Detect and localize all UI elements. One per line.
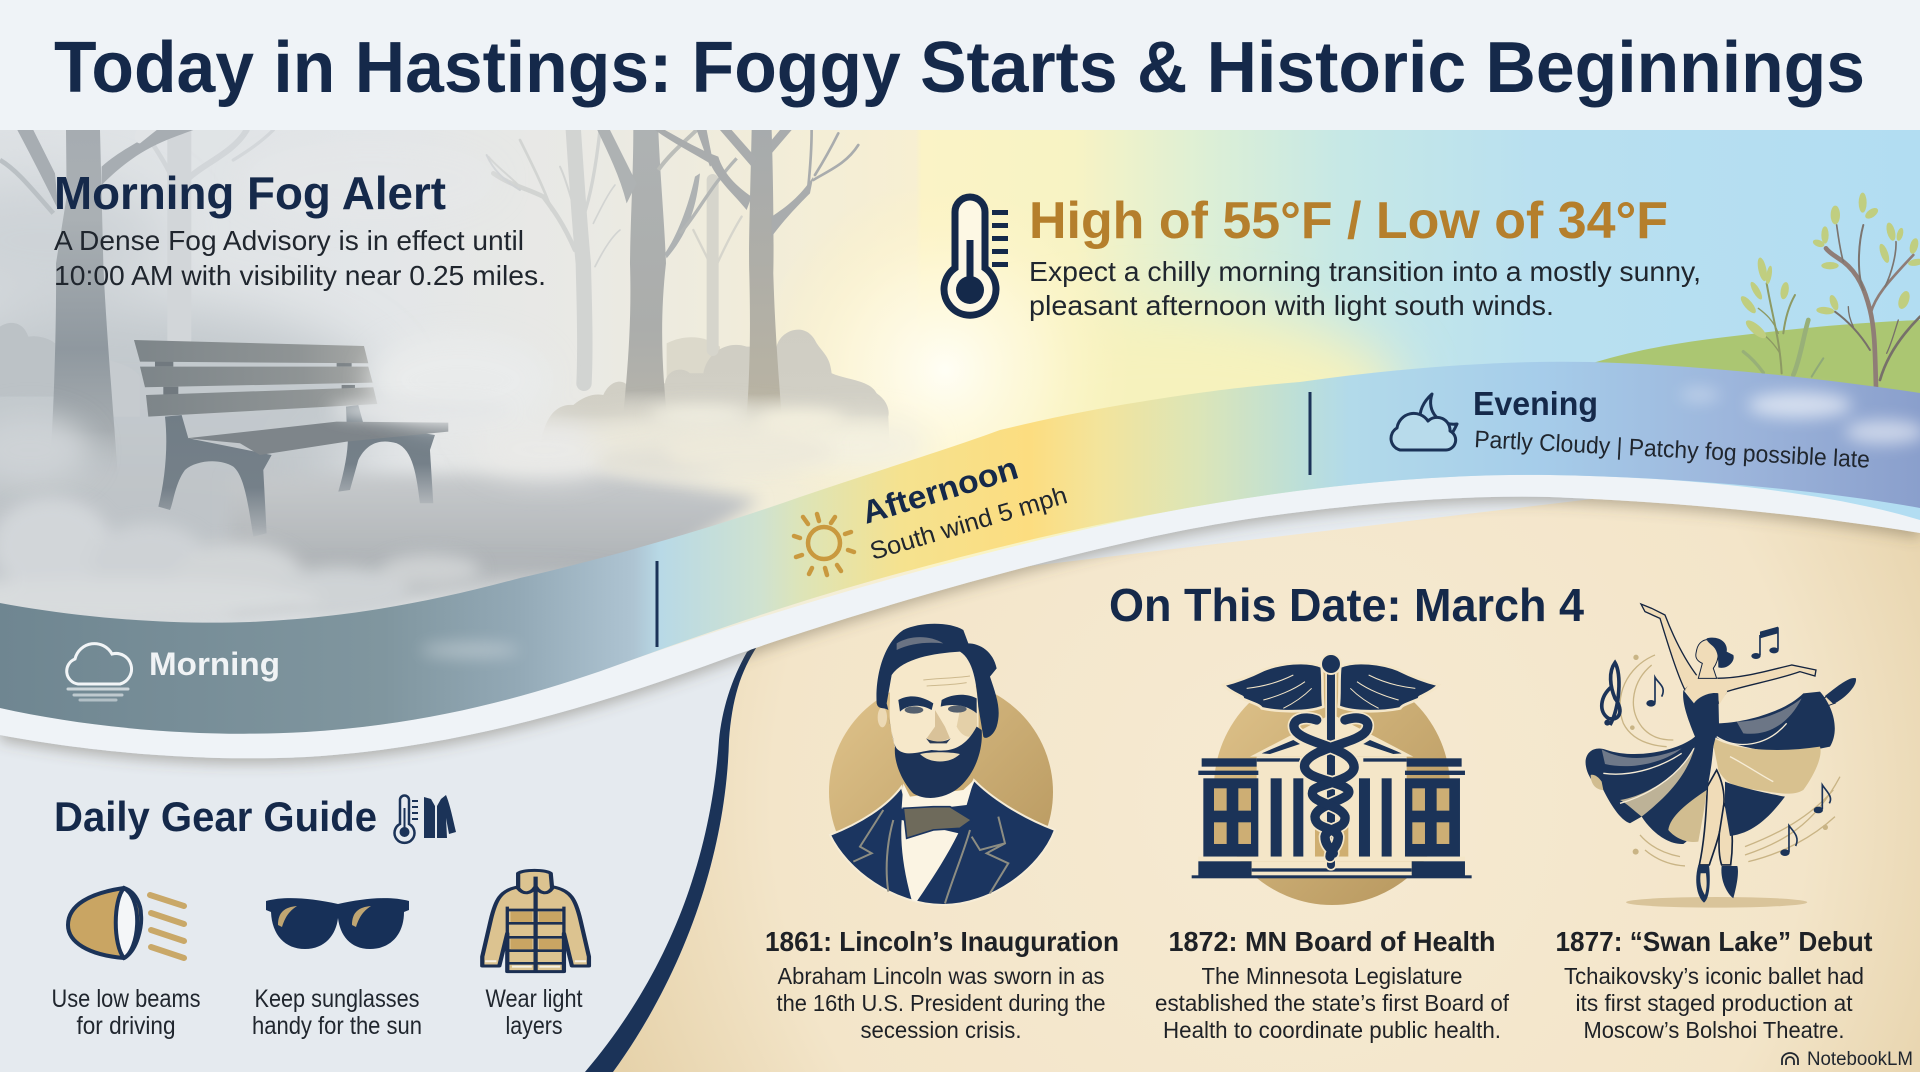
icon: puffer jacket	[482, 870, 589, 972]
panel: sky and fog scene	[0, 130, 1920, 660]
panel: gear guide background	[0, 600, 1920, 1072]
heading: on this date: On This Date: March 4	[1109, 579, 1584, 631]
icon: morning fog cloud	[67, 644, 132, 700]
green hill	[1594, 320, 1920, 393]
text block: high and low temperature: pleasant afternoon with light south winds.	[1029, 290, 1554, 321]
event: Minnesota board of health text: established the state’s first Board of	[1155, 990, 1510, 1016]
header bar	[0, 0, 1920, 130]
divider: afternoon to evening	[1308, 392, 1312, 475]
text block: afternoon	[858, 450, 1070, 566]
event: Minnesota board of health text: Health to coordinate public health.	[1163, 1017, 1501, 1043]
legs and shoes	[1699, 770, 1724, 865]
gear labels: Wear light	[486, 985, 583, 1013]
wings	[1223, 663, 1439, 711]
illustration: Abraham Lincoln portrait	[829, 624, 1055, 905]
event: Swan Lake debut text	[1556, 926, 1872, 1043]
tree A foreground	[0, 130, 193, 483]
tree B	[150, 130, 520, 340]
icon: sunglasses	[266, 898, 409, 949]
icon: thermometer	[944, 197, 1008, 315]
building facade	[1192, 714, 1472, 878]
skirt	[1586, 737, 1713, 844]
caduceus staff and snakes	[1294, 654, 1368, 865]
trees C and D	[597, 130, 858, 417]
icon: moon and cloud	[1391, 394, 1457, 450]
icon: low-beam headlight	[68, 888, 184, 958]
gear labels	[52, 985, 583, 1040]
text block: afternoon: Afternoon	[858, 450, 1022, 531]
gear labels: Use low beams	[52, 985, 200, 1013]
arms, torso and head	[1641, 604, 1698, 690]
event: Lincoln's inauguration text: 1861: Lincoln’s Inauguration	[765, 926, 1119, 957]
distant haze	[0, 182, 378, 582]
gear labels: for driving	[76, 1012, 176, 1040]
text block: morning fog alert: 10:00 AM with visibility near 0.25 miles.	[54, 260, 546, 291]
gear labels: handy for the sun	[252, 1012, 422, 1040]
text block: evening: Evening	[1473, 385, 1598, 422]
text block: evening	[1473, 385, 1871, 474]
navy swoosh border	[585, 645, 758, 1072]
fog clouds	[0, 354, 896, 616]
event: Lincoln's inauguration text: the 16th U.S. President during the	[776, 990, 1106, 1016]
icon: sun	[794, 514, 854, 575]
label: morning: Morning	[149, 646, 280, 682]
text block: high and low temperature: High of 55°F / Low of 34°F	[1029, 192, 1668, 250]
event: Swan Lake debut text: Moscow’s Bolshoi Theatre.	[1584, 1017, 1844, 1043]
event: Lincoln's inauguration text	[765, 926, 1119, 1043]
heading: daily gear guide: Daily Gear Guide	[54, 793, 377, 840]
text block: morning fog alert	[54, 167, 546, 291]
event: Lincoln's inauguration text: Abraham Lincoln was sworn in as	[778, 963, 1104, 989]
gear labels: Keep sunglasses	[254, 985, 420, 1013]
text block: afternoon: South wind 5 mph	[867, 481, 1070, 566]
white ribbon edge	[0, 120, 1920, 758]
timeline ribbon band	[0, 362, 1920, 734]
gear labels: layers	[506, 1012, 562, 1040]
title: Today in Hastings: Foggy Starts & Historic Beginnings	[54, 28, 1865, 108]
ribbon clouds	[420, 389, 1920, 657]
bushes behind fog	[546, 330, 889, 428]
left bushes	[0, 323, 55, 366]
event: Minnesota board of health text: The Minnesota Legislature	[1202, 963, 1462, 989]
bare foggy trees	[0, 130, 858, 483]
foggy ground	[230, 470, 760, 610]
event: Lincoln's inauguration text: secession crisis.	[860, 1017, 1022, 1043]
extended leg and shoe	[1802, 696, 1835, 718]
spring trees	[1738, 193, 1920, 387]
pale distant trees	[488, 130, 742, 383]
NotebookLM watermark: NotebookLM	[1807, 1049, 1913, 1070]
text block: morning fog alert: A Dense Fog Advisory is in effect until	[54, 225, 524, 256]
music notes	[1602, 627, 1831, 856]
event: Minnesota board of health text: 1872: MN Board of Health	[1168, 926, 1496, 957]
text block: high and low temperature: Expect a chilly morning transition into a mostly sunny,	[1029, 256, 1701, 287]
event: Swan Lake debut text: Tchaikovsky’s iconic ballet had	[1564, 963, 1864, 989]
icon: thermometer and coat	[394, 795, 456, 843]
text block: high and low temperature	[1029, 192, 1701, 321]
divider: morning to afternoon	[656, 561, 658, 647]
panel: parchment history background	[613, 460, 1920, 1072]
event: Swan Lake debut text: its first staged production at	[1576, 990, 1853, 1016]
illustration: caduceus over capitol building	[1192, 654, 1472, 905]
event: Minnesota board of health text	[1155, 926, 1510, 1043]
text block: evening: Partly Cloudy | Patchy fog possible late	[1474, 426, 1871, 474]
illustration: ballerina with music notes	[1586, 604, 1856, 908]
text block: morning fog alert: Morning Fog Alert	[54, 167, 446, 219]
event: Swan Lake debut text: 1877: “Swan Lake” Debut	[1556, 926, 1872, 957]
bench	[134, 340, 448, 537]
motion swirls	[1620, 655, 1840, 866]
